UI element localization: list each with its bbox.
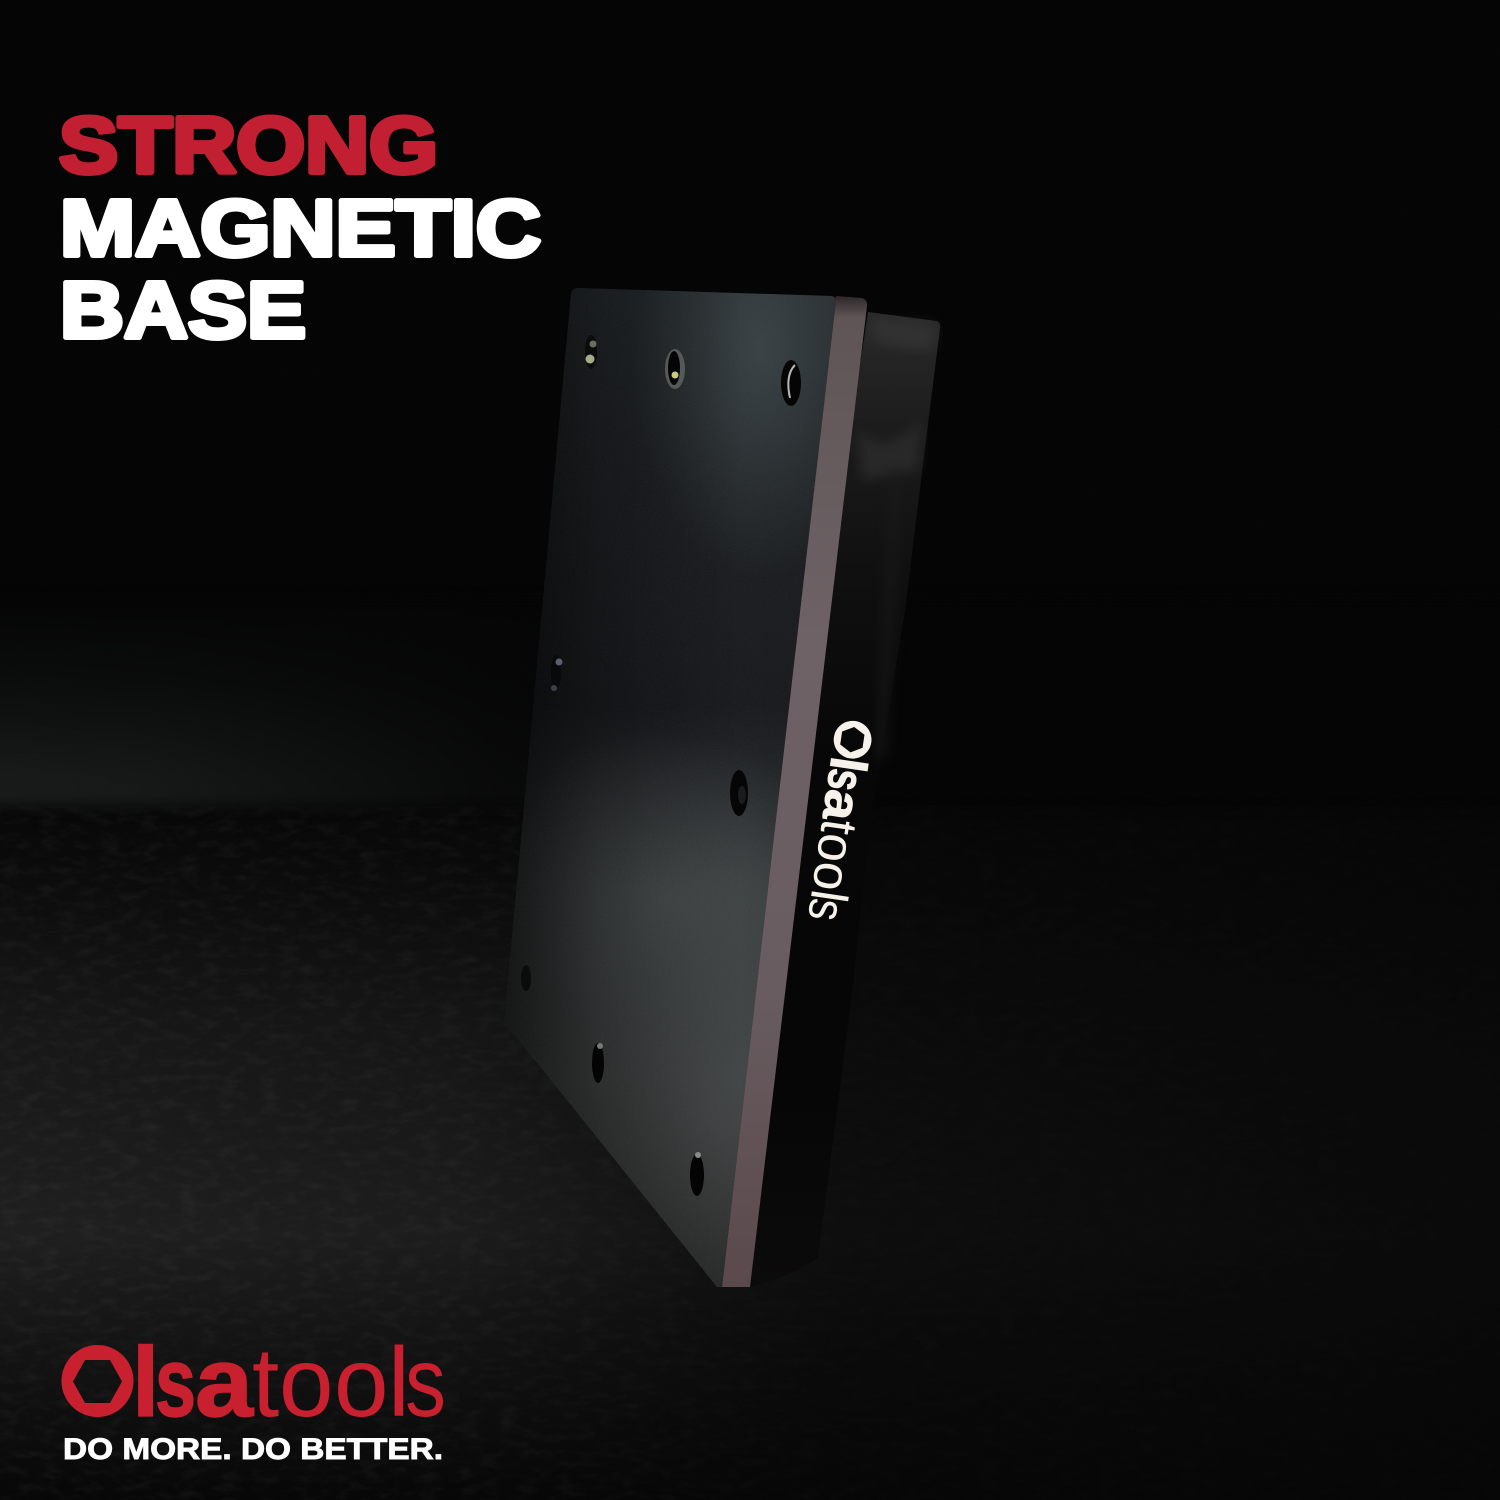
- product: magnetic base plate: [470, 120, 940, 1295]
- side logo text: lsa: [812, 753, 878, 825]
- logo text: lsa: [132, 1327, 255, 1437]
- side logo text: tools: l: [800, 886, 859, 906]
- magnet body behind plate: [722, 312, 940, 1287]
- machined plate edge: [722, 296, 867, 1287]
- heading line: STRONG: STRONG: [59, 100, 438, 190]
- icon: hex O: [831, 718, 874, 761]
- logo text: tools: o: [279, 1327, 334, 1437]
- side logo text: tools: o: [801, 858, 863, 895]
- hole: middle left: [551, 655, 562, 691]
- plate face: [504, 288, 836, 1287]
- side logo text: tools: [797, 816, 869, 925]
- side logo text: lsa: s: [816, 765, 877, 795]
- side logo text: lsa: a: [812, 786, 874, 825]
- icon: hex O: [62, 1345, 134, 1417]
- side logo text: tools: s: [797, 895, 858, 925]
- logo text: tools: t: [252, 1327, 279, 1437]
- logo text: tools: o: [334, 1327, 389, 1437]
- tagline: DO MORE. DO BETTER.: [63, 1433, 443, 1466]
- logo text: lsa: s: [155, 1327, 196, 1437]
- side logo text: tools: o: [806, 830, 867, 866]
- screw holes: [521, 335, 801, 1196]
- side logo text: lsa: l: [819, 753, 878, 776]
- side logo text: tools: t: [810, 816, 869, 838]
- hole: top row left: [585, 335, 597, 369]
- logo text: tools: s: [405, 1327, 446, 1437]
- hole: bottom middle: [592, 1043, 604, 1083]
- hole: bottom left: [521, 965, 531, 991]
- side logo: Olsatools: [797, 717, 884, 925]
- wall glow: [0, 600, 1500, 806]
- logo text: lsa: l: [132, 1327, 159, 1437]
- brand logo: Olsatools: [62, 1327, 446, 1437]
- logo text: tools: [252, 1327, 446, 1437]
- heading line: MAGNETIC: MAGNETIC: [60, 184, 541, 272]
- heading: STRONG MAGNETIC BASE: [59, 100, 541, 354]
- logo text: lsa: a: [195, 1327, 255, 1437]
- floor surface: [0, 806, 1500, 1500]
- logo text: tools: l: [388, 1327, 410, 1437]
- hole: middle right: [730, 770, 748, 816]
- hole: top row middle: [665, 349, 685, 389]
- hole: bottom right: [690, 1152, 704, 1196]
- heading line: BASE: BASE: [60, 266, 306, 354]
- hole: top row right: [781, 360, 801, 406]
